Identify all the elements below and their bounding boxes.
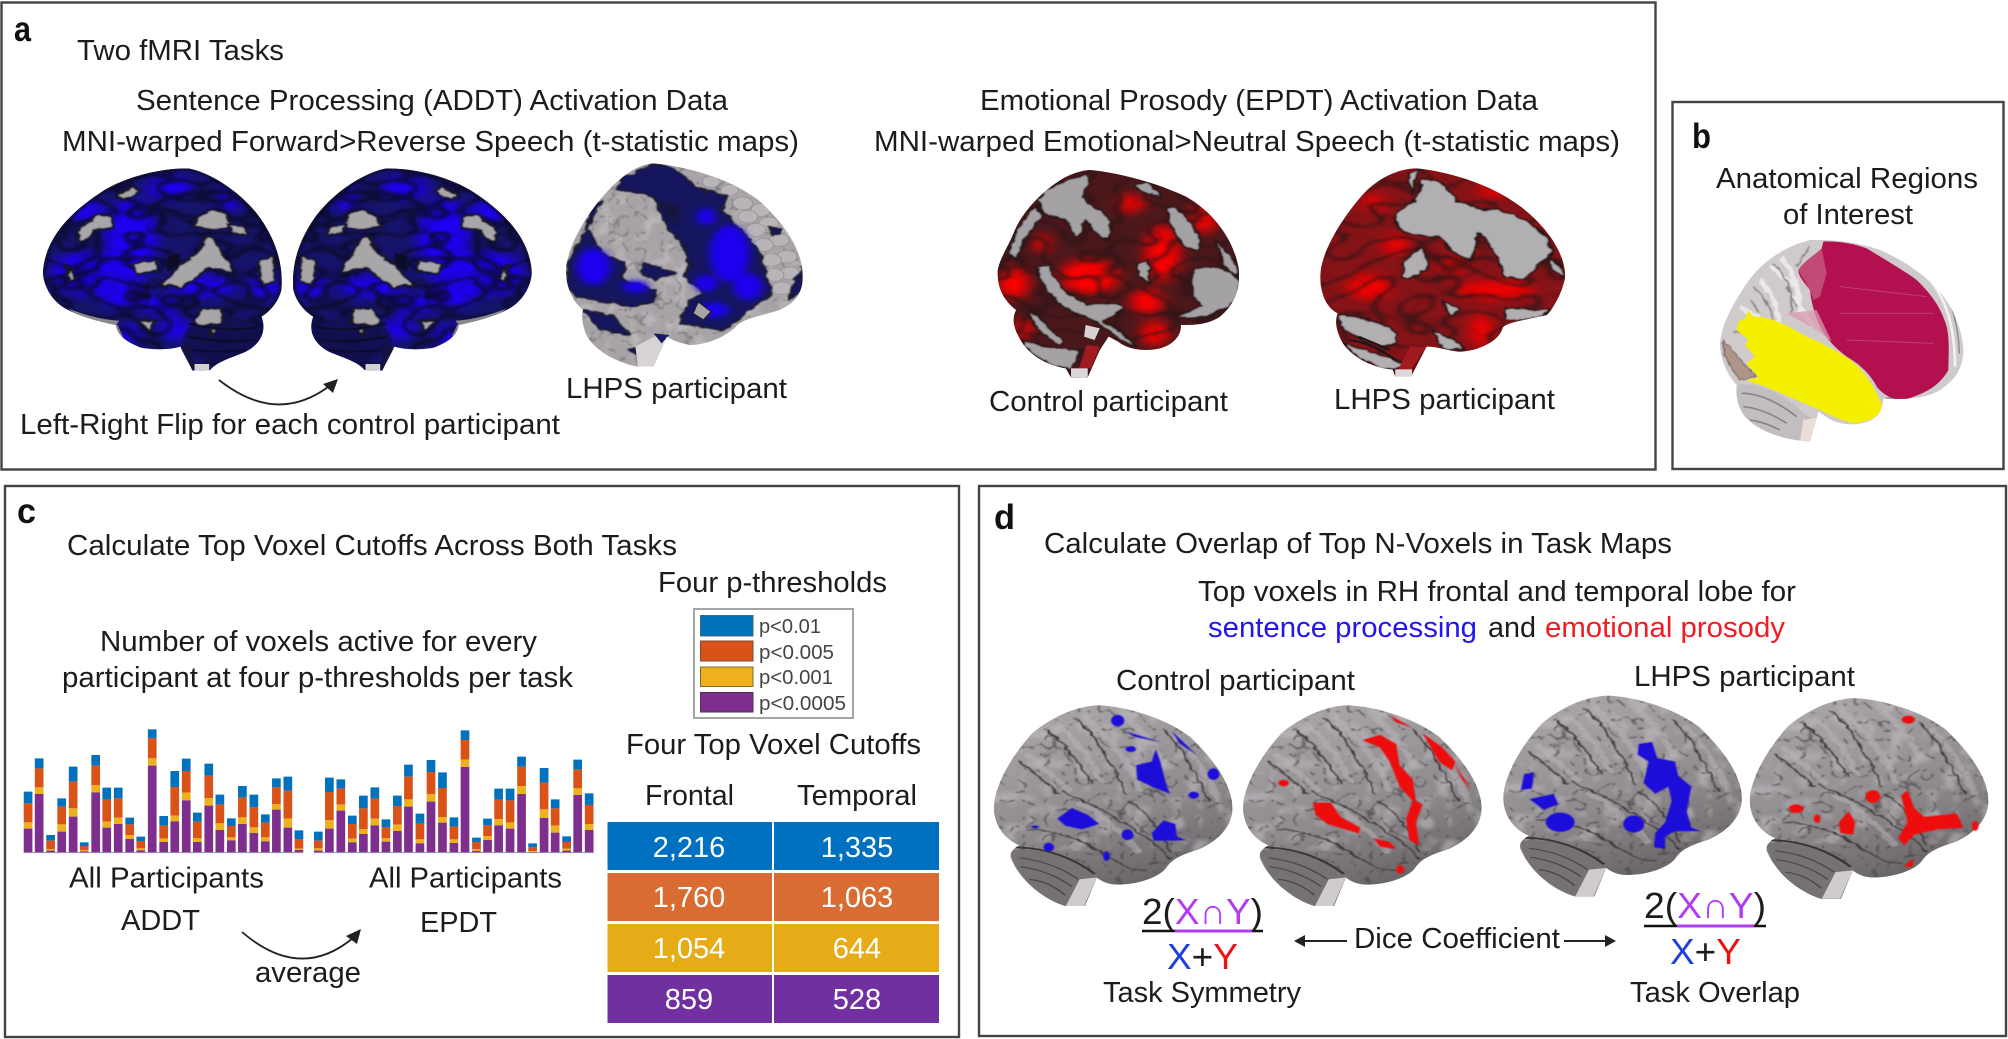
table: top voxel cutoffs	[608, 822, 939, 1023]
control brain, sentence processing foci	[987, 701, 1239, 911]
legend: p thresholds: p<0.001	[759, 667, 833, 689]
formula: task overlap Dice	[1644, 885, 1766, 972]
formula: task overlap Dice: 2(X∩Y)	[1644, 885, 1766, 926]
heading: four p-thresholds: Four p-thresholds	[658, 567, 887, 599]
control brain, sentence processing, left view	[31, 163, 293, 377]
heading: of interest: of Interest	[1783, 199, 1913, 231]
red brain images group	[220, 168, 1960, 439]
four grey brains group	[994, 696, 1988, 946]
caption: LHPS participant, sentence processing: LHPS participant	[566, 373, 787, 405]
subheading: forward vs reverse speech: MNI-warped Forward>Reverse Speech (t-statistic maps)	[62, 126, 799, 158]
table: top voxel cutoffs: 1,063	[821, 882, 893, 914]
caption: task symmetry: Task Symmetry	[1103, 977, 1302, 1009]
arrow: dice right	[1564, 935, 1616, 947]
LHPS brain, sentence processing	[566, 163, 803, 367]
table: top voxel cutoffs: 859	[665, 984, 713, 1016]
caption: task overlap: Task Overlap	[1630, 977, 1800, 1009]
panel b: anatomical regions of interest	[1672, 102, 2004, 469]
panel d label: d	[994, 498, 1015, 537]
legend: p thresholds: p<0.01	[759, 616, 821, 638]
heading: emotional prosody activation data: Emotional Prosody (EPDT) Activation Data	[980, 85, 1538, 117]
legend: p thresholds: p<0.0005	[759, 693, 846, 715]
column header: temporal: Temporal	[797, 780, 917, 812]
brain with frontal and temporal regions	[1720, 240, 1964, 442]
text: sentence processing coloured: sentence processing	[1208, 612, 1477, 644]
table: top voxel cutoffs: 1,760	[653, 882, 725, 914]
text: participant at four thresholds: participant at four p-thresholds per task	[62, 662, 574, 694]
flipped control brain, sentence processing	[282, 163, 543, 377]
panel c label: c	[17, 492, 36, 531]
table: top voxel cutoffs: 528	[833, 984, 881, 1016]
stacked bar chart: ADDT and EPDT participants	[24, 729, 594, 854]
heading: four top voxel cutoffs: Four Top Voxel Cutoffs	[626, 729, 921, 761]
control brain, emotional prosody foci	[1236, 701, 1488, 911]
blue brain images group	[42, 163, 1960, 439]
formula: task symmetry Dice: 2(X∩Y)	[1142, 891, 1263, 932]
column header: frontal: Frontal	[645, 780, 734, 812]
arrow: dice left	[1294, 935, 1347, 947]
text: emotional prosody coloured: emotional prosody	[1545, 612, 1786, 644]
label: average: average	[255, 957, 361, 989]
legend: p thresholds: p<0.005	[759, 642, 834, 664]
heading: Two fMRI Tasks: Two fMRI Tasks	[77, 35, 284, 67]
caption: control participant, emotional prosody: Control participant	[989, 386, 1228, 418]
heading: calculate overlap: Calculate Overlap of Top N-Voxels in Task Maps	[1044, 528, 1672, 560]
formula: task symmetry Dice	[1142, 891, 1263, 977]
label: ADDT: ADDT	[121, 905, 200, 937]
caption: LHPS participant: LHPS participant	[1634, 661, 1855, 693]
table: top voxel cutoffs: 644	[833, 933, 881, 965]
label: dice coefficient: Dice Coefficient	[1354, 923, 1560, 955]
text: and: and	[1488, 612, 1536, 644]
text: number of voxels: Number of voxels active for every	[100, 626, 538, 658]
control brain, emotional prosody	[993, 167, 1249, 383]
text: top voxels in RH: Top voxels in RH frontal and temporal lobe for	[1198, 576, 1797, 608]
table: top voxel cutoffs: 1,054	[653, 933, 725, 965]
LHPS brain, emotional prosody foci	[1742, 694, 1995, 904]
arrow: average	[242, 929, 361, 959]
label: all participants EPDT: All Participants	[369, 862, 562, 894]
heading: anatomical regions: Anatomical Regions	[1716, 163, 1978, 195]
panel a: two fMRI tasks	[2, 2, 1656, 470]
panel a label: a	[14, 10, 31, 49]
caption: left-right flip: Left-Right Flip for each control participant	[20, 409, 560, 441]
subheading: emotional vs neutral speech: MNI-warped Emotional>Neutral Speech (t-statistic maps)	[874, 126, 1620, 158]
legend: p thresholds	[694, 609, 853, 718]
panel d: overlap of top voxels	[979, 486, 2006, 1036]
table: top voxel cutoffs: 2,216	[653, 832, 725, 864]
LHPS brain, sentence processing foci	[1496, 691, 1748, 902]
caption: control participant: Control participant	[1116, 665, 1355, 697]
heading: sentence processing activation data: Sentence Processing (ADDT) Activation Data	[136, 85, 728, 117]
formula: task overlap Dice: X+Y	[1670, 931, 1741, 972]
LHPS brain, emotional prosody	[1317, 165, 1573, 382]
label: all participants ADDT: All Participants	[69, 862, 264, 894]
table: top voxel cutoffs: 1,335	[821, 832, 893, 864]
panel b label: b	[1692, 117, 1711, 156]
arrow: left-right flip	[219, 379, 338, 404]
formula: task symmetry Dice: X+Y	[1167, 936, 1238, 977]
panel c: top voxel cutoffs	[5, 486, 959, 1037]
label: EPDT: EPDT	[420, 907, 497, 939]
heading: calculate top voxel cutoffs: Calculate Top Voxel Cutoffs Across Both Tasks	[67, 530, 677, 562]
caption: LHPS participant, emotional prosody: LHPS participant	[1334, 384, 1555, 416]
